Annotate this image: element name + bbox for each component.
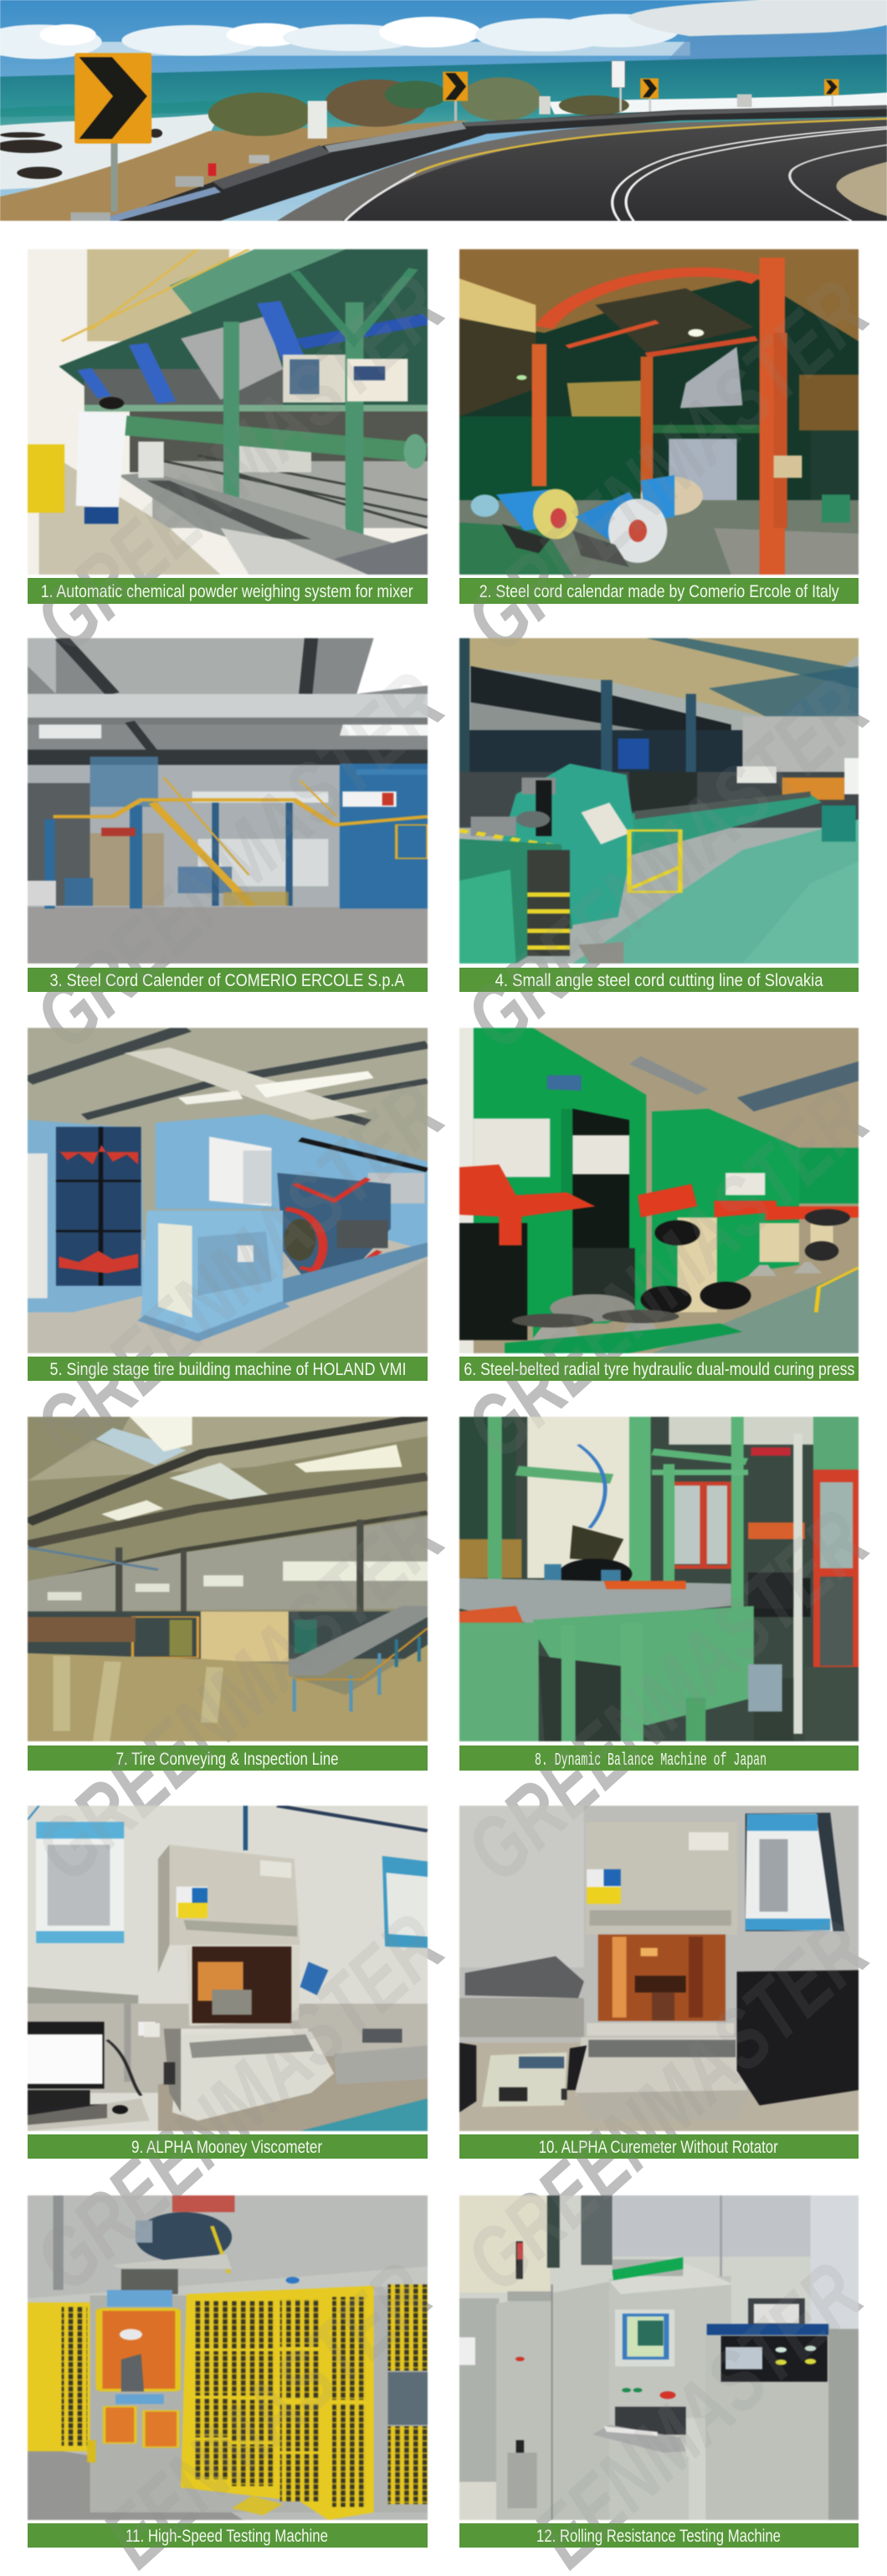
panel: item 6 bbox=[459, 1027, 859, 1381]
photo: high-speed testing machine bbox=[27, 2195, 428, 2521]
control box bbox=[482, 2052, 567, 2107]
panel: item 5 bbox=[27, 1027, 428, 1381]
caption bar: 7. Tire Conveying & Inspection Line bbox=[116, 1750, 339, 1769]
watermark: background brand text in gaps: GREENMASTER bbox=[17, 1486, 462, 1900]
gravel shoulder bbox=[277, 117, 887, 221]
poster right bbox=[382, 1856, 428, 1948]
right cabinet bbox=[705, 2326, 830, 2520]
caption bar bbox=[459, 2523, 859, 2548]
photo: steel cord cutting line bbox=[459, 637, 859, 964]
watermark: background brand text in gaps: GREENMASTER bbox=[17, 654, 462, 1068]
panel: item 7 bbox=[27, 1416, 428, 1771]
watermark: faint brand text over photos: GREENMASTER bbox=[17, 1486, 462, 1900]
second press bbox=[652, 1109, 799, 1321]
panel: item 12 bbox=[459, 2195, 859, 2548]
road surface bbox=[342, 120, 887, 221]
photo: rolling resistance testing machine bbox=[459, 2195, 859, 2521]
photo: curemeter without rotator bbox=[459, 1805, 859, 2132]
panel: item 8 bbox=[459, 1416, 859, 1771]
photo: curing presses bbox=[459, 1027, 859, 1354]
watermark: background brand text in gaps: GREENMASTER bbox=[17, 257, 462, 671]
center orange window bbox=[95, 2308, 181, 2391]
shelf bbox=[28, 1987, 138, 2004]
chevron signs bbox=[74, 53, 151, 144]
caption bar: 9. ALPHA Mooney Viscometer bbox=[131, 2138, 322, 2157]
counter bbox=[158, 2051, 428, 2131]
photo: mooney viscometer bbox=[27, 1805, 428, 2132]
panel: item 1 bbox=[27, 248, 428, 604]
guardrail bbox=[105, 105, 887, 221]
watermark: background brand text in gaps: GREENMASTER bbox=[17, 1064, 462, 1478]
main gate bbox=[181, 2286, 374, 2520]
watermark: faint brand text over photos: GREENMASTER bbox=[17, 1896, 462, 2310]
watermark: faint brand text over photos: EENMASTER bbox=[85, 2245, 449, 2576]
right-side bench device bbox=[334, 2046, 428, 2084]
panel: item 9 bbox=[27, 1805, 428, 2159]
panel: item 10 bbox=[459, 1805, 859, 2159]
photo: tire building machine bbox=[27, 1027, 428, 1354]
poster bbox=[746, 1812, 844, 1931]
watermark: faint brand text over photos: GREENMASTER bbox=[17, 654, 462, 1068]
caption bar: 4. Small angle steel cord cutting line of Slovakia bbox=[495, 971, 823, 990]
sign panels bbox=[107, 2290, 172, 2307]
watermark: background brand text in gaps: GREENMASTER bbox=[17, 1896, 462, 2310]
caption bar: 10. ALPHA Curemeter Without Rotator bbox=[539, 2138, 778, 2157]
caption bar: 12. Rolling Resistance Testing Machine bbox=[536, 2527, 781, 2546]
motor bbox=[136, 2212, 232, 2262]
black case bbox=[737, 1970, 859, 2105]
rolls bbox=[544, 272, 756, 327]
viscometer bbox=[158, 1845, 300, 1945]
caption bar bbox=[28, 2134, 428, 2159]
panel: item 2 bbox=[459, 248, 859, 604]
poles and posts bbox=[110, 142, 118, 212]
cabinets bbox=[459, 2298, 499, 2520]
panel: item 3 bbox=[27, 637, 428, 992]
caption bar bbox=[459, 1745, 859, 1771]
photo: steel cord calendar bbox=[459, 248, 859, 575]
caption bar bbox=[459, 2134, 859, 2159]
photo: conveying and inspection hall bbox=[27, 1416, 428, 1742]
hero: coastal road photo with chevron signs bbox=[0, 0, 887, 222]
bushes bbox=[208, 93, 312, 136]
left gate bbox=[28, 2303, 90, 2451]
dry grass bbox=[0, 120, 469, 221]
watermark: background brand text in gaps: EENMASTER bbox=[85, 2245, 449, 2576]
monitor bbox=[28, 2021, 105, 2088]
panel: item 11 bbox=[27, 2195, 428, 2548]
curemeter bbox=[585, 1822, 738, 1935]
surf bbox=[0, 113, 221, 190]
cloud bank bbox=[0, 0, 887, 59]
photo: steel cord calender hall bbox=[27, 637, 428, 964]
caption bar bbox=[28, 2523, 428, 2548]
watermark: faint brand text over photos: GREENMASTER bbox=[17, 1064, 462, 1478]
poster left bbox=[36, 1822, 124, 1943]
caption bar: 11. High-Speed Testing Machine bbox=[126, 2527, 328, 2546]
road markings bbox=[416, 119, 887, 173]
photo: chemical powder weighing system bbox=[27, 248, 428, 575]
panel: item 4 bbox=[459, 637, 859, 992]
caption bar bbox=[28, 1745, 428, 1771]
photo: dynamic balance machine bbox=[459, 1416, 859, 1742]
